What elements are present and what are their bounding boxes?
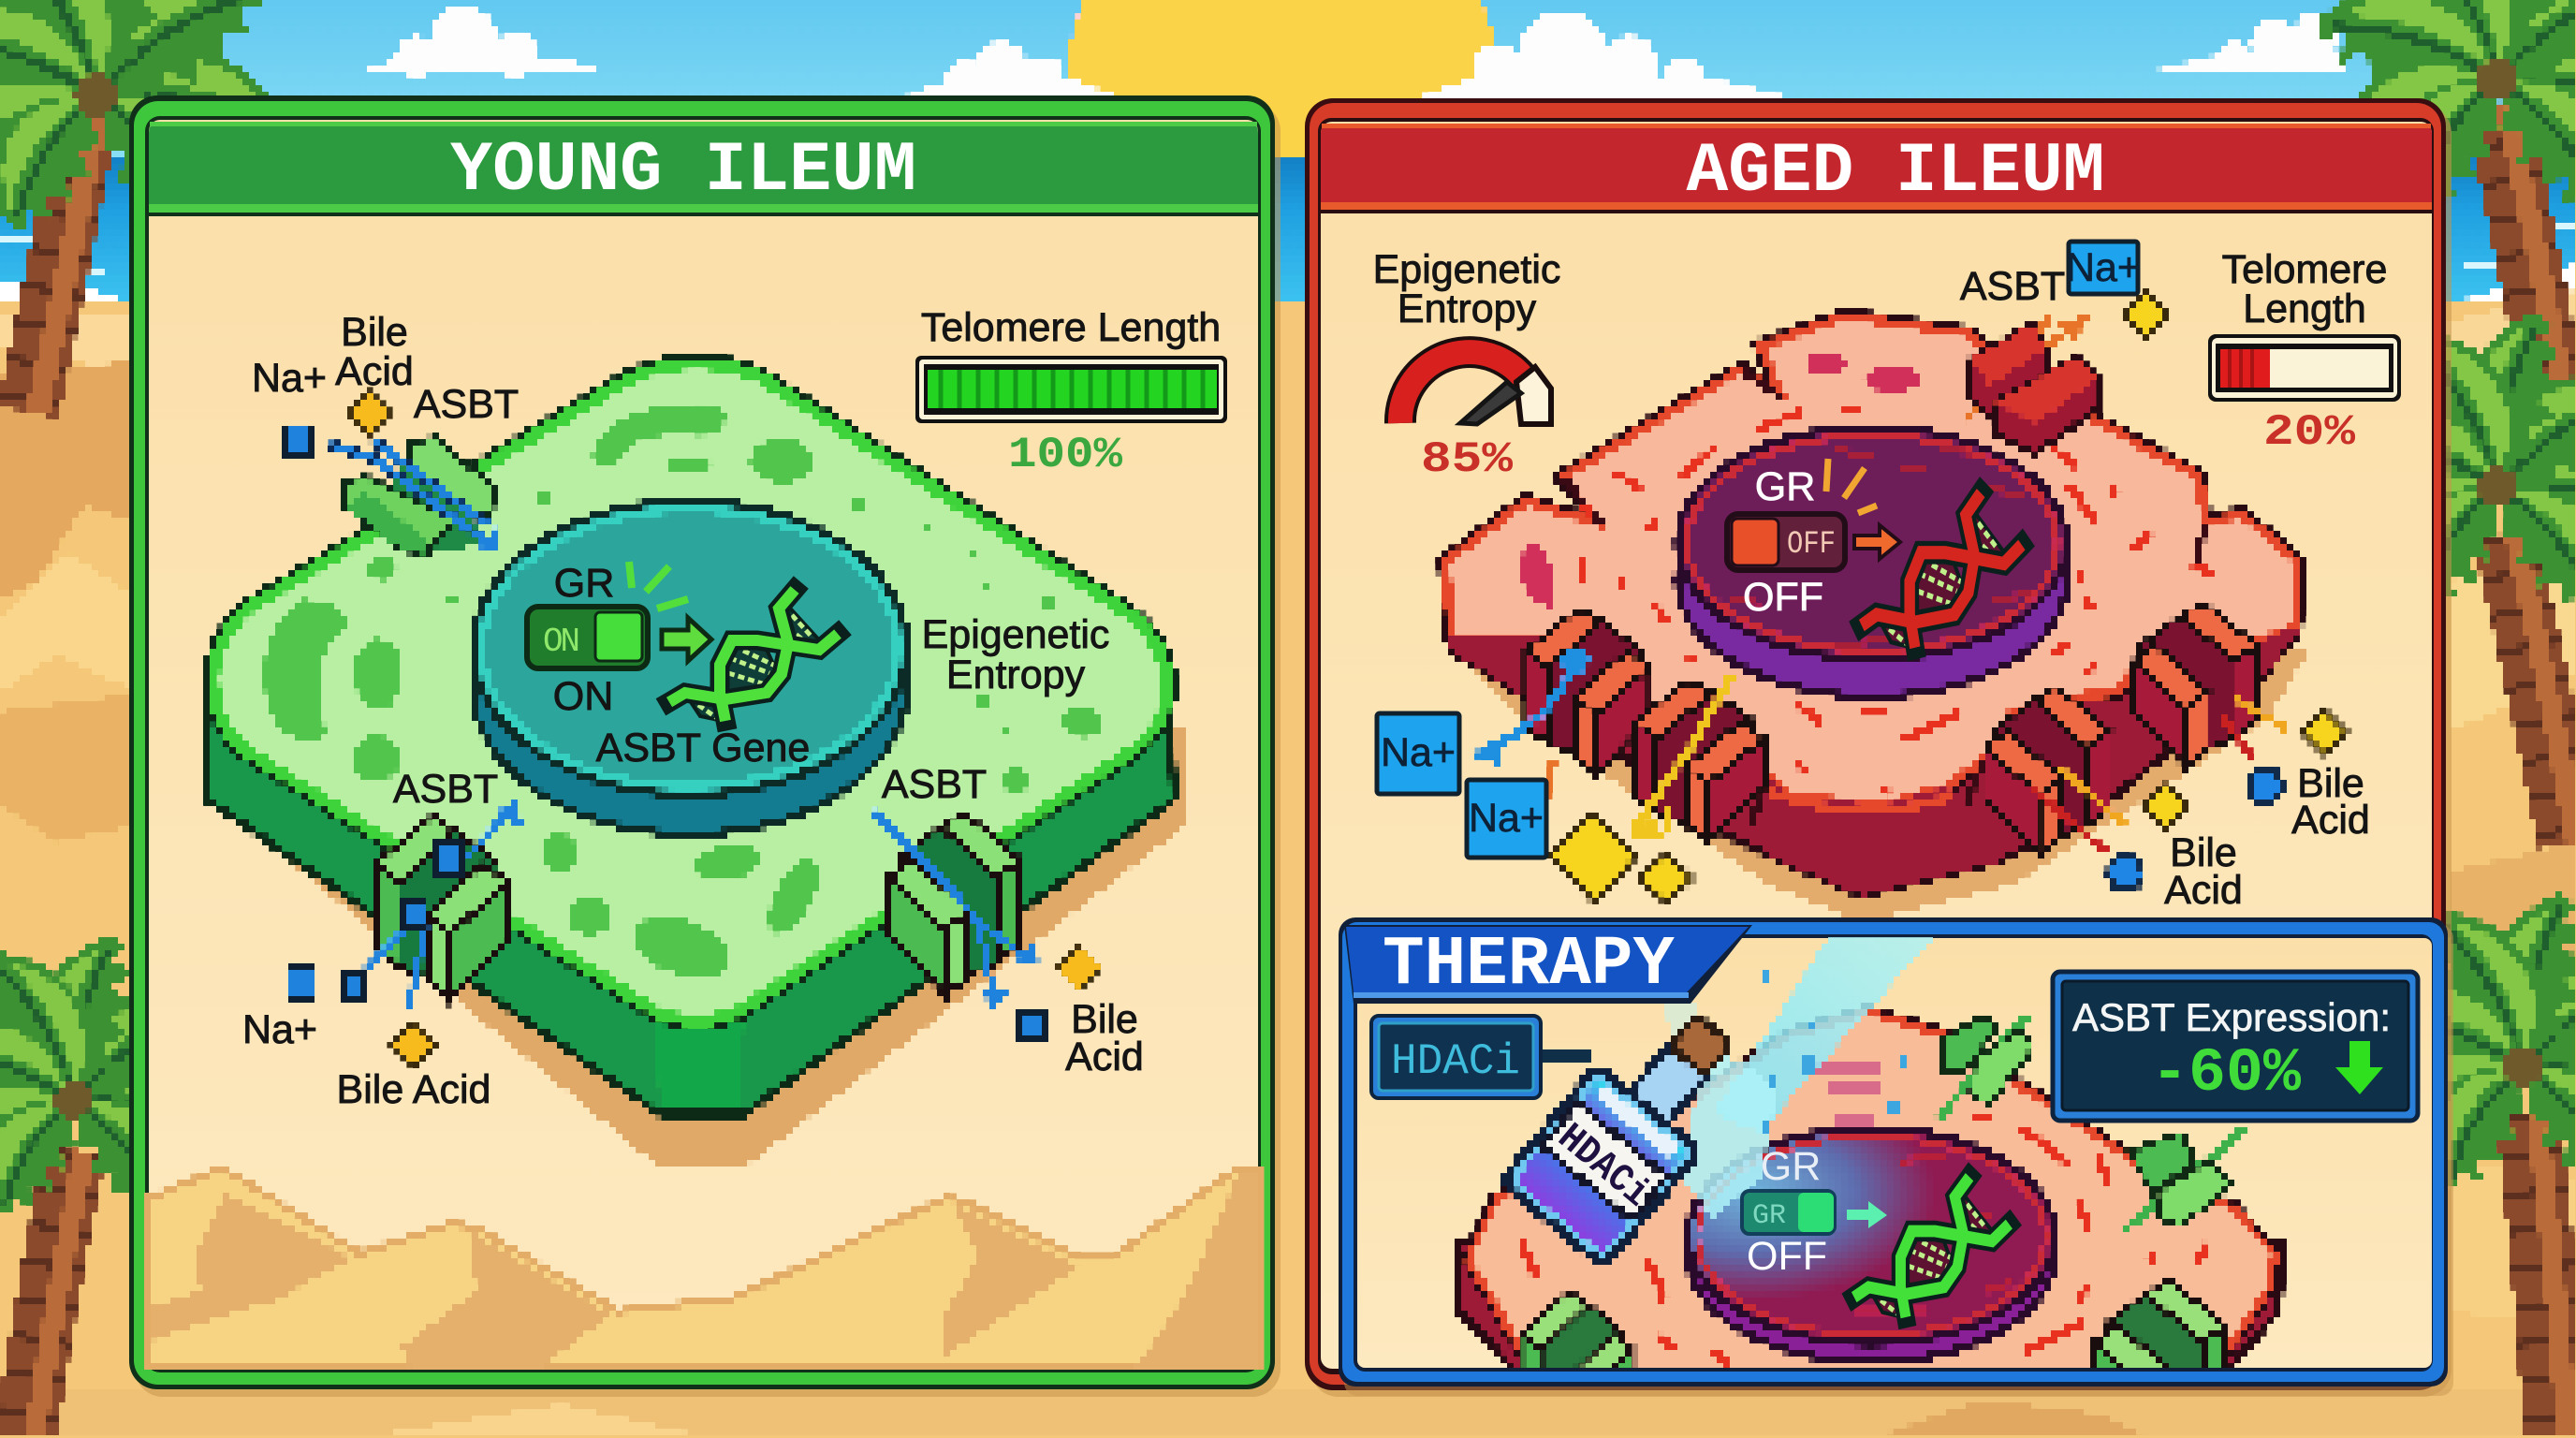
nucleus content: therapy <box>1742 1144 2009 1317</box>
label: epigenetic entropy: Entropy <box>946 653 1086 697</box>
palm tree: bottom right <box>2339 882 2576 1438</box>
toggle: GR recovering: GR <box>1752 1200 1786 1232</box>
activity sparks <box>629 562 688 609</box>
toggle: GR ON: ON <box>543 623 580 661</box>
panel frame: blue <box>1339 917 2453 1396</box>
label: bile acid lower left: Bile Acid <box>337 1067 490 1112</box>
gauge arc <box>1400 352 1551 424</box>
value: 20%: 20% <box>2263 408 2355 457</box>
label: telomere length: Telomere <box>2222 247 2387 292</box>
value: 100%: 100% <box>1008 431 1122 479</box>
epigenetic entropy gauge <box>1373 247 1560 484</box>
title: aged ileum: AGED ILEUM <box>1687 132 2104 212</box>
label: ASBT Gene: ASBT Gene <box>596 726 810 770</box>
panel: therapy <box>1339 917 2453 1438</box>
label: ASBT top: ASBT <box>414 382 519 427</box>
toggle: GR recovering <box>1742 1191 1835 1234</box>
label: telomere length: Length <box>2243 286 2366 331</box>
header bar: aged <box>1321 124 2432 213</box>
Na+ chip left 1 <box>1377 713 1459 794</box>
label: bile acid top: Bile <box>341 310 408 355</box>
Na+ chip left 1: Na+ <box>1381 730 1456 775</box>
bar: telomere 20% <box>2208 334 2401 402</box>
arrow: restored signal <box>1847 1201 1887 1228</box>
telomere meter: young <box>915 305 1227 479</box>
value: 85%: 85% <box>1421 435 1513 484</box>
clouds <box>354 6 2348 101</box>
label: OFF: OFF <box>1747 1234 1827 1279</box>
Na+ chip left 2: Na+ <box>1469 796 1544 841</box>
icon: damaged DNA <box>1862 493 2022 648</box>
label: GR: GR <box>1761 1144 1821 1189</box>
toggle: GR OFF: OFF <box>1787 527 1836 563</box>
panel: young ileum <box>129 95 1281 1397</box>
palm tree: middle right <box>2314 301 2576 843</box>
label: ASBT lower right: ASBT <box>882 762 987 807</box>
Na+ chip left 2 <box>1467 780 1546 858</box>
label: ASBT lower left: ASBT <box>393 767 498 812</box>
palm tree: bottom left <box>0 924 248 1438</box>
arrow: blocked signal <box>1854 525 1900 559</box>
mini damaged cell with therapy <box>1455 1003 2287 1368</box>
arrow: GR to gene <box>662 618 711 661</box>
isometric healthy cell <box>208 363 1187 1164</box>
label: epigenetic entropy: Epigenetic <box>922 612 1109 657</box>
label: bile acid top: Acid <box>335 349 414 394</box>
arrow: down <box>2335 1041 2383 1094</box>
toggle: GR ON <box>527 607 648 668</box>
title tab: therapy: THERAPY <box>1383 926 1676 1005</box>
label: epigenetic entropy: Epigenetic <box>1373 247 1560 292</box>
isometric damaged cell <box>1446 294 2347 922</box>
callout: ASBT expression <box>2053 972 2418 1121</box>
label: GR: GR <box>554 561 614 606</box>
callout: ASBT expression: -60% <box>2151 1038 2301 1108</box>
bar: telomere 100% <box>915 356 1227 423</box>
callout: HDACi drug label <box>1371 1016 1591 1098</box>
spray of drug <box>1661 940 1931 1217</box>
telomere meter: aged <box>2208 247 2401 457</box>
icon: DNA helix <box>669 590 838 721</box>
palm tree: top right <box>2305 0 2576 412</box>
label: telomere length: Telomere Length <box>921 305 1221 350</box>
icon: HDACi bottle <box>1501 987 1765 1267</box>
damage sparks <box>1826 459 1877 513</box>
label: OFF: OFF <box>1743 575 1823 620</box>
label: bile acid lower: Bile <box>2170 830 2237 875</box>
Na+ chip top: Na+ <box>2066 245 2141 290</box>
callout: ASBT expression: ASBT Expression: <box>2072 995 2391 1039</box>
panel frame: red <box>1305 98 2452 1397</box>
label: bile acid lower: Acid <box>2164 868 2243 913</box>
palm tree: top left <box>0 0 300 412</box>
label: bile acid lower right: Bile <box>1071 997 1138 1042</box>
label: Na+ lower left: Na+ <box>242 1007 317 1052</box>
callout: HDACi drug label: HDACi <box>1391 1037 1520 1086</box>
nucleus content: aged <box>1727 459 2022 648</box>
label: bile acid right: Bile <box>2297 761 2364 806</box>
label: ON: ON <box>553 674 613 719</box>
label: bile acid right: Acid <box>2291 798 2370 843</box>
icon: repaired DNA <box>1854 1177 2009 1317</box>
toggle: GR OFF <box>1727 514 1845 570</box>
sand dunes <box>149 1168 1258 1367</box>
label: ASBT top: ASBT <box>1960 264 2065 309</box>
panel: aged ileum <box>1305 98 2452 1397</box>
label: Na+ top: Na+ <box>252 356 327 401</box>
nucleus content: young <box>527 561 838 770</box>
label: epigenetic entropy: Entropy <box>1398 286 1537 331</box>
title: young ileum: YOUNG ILEUM <box>450 131 916 211</box>
label: HDACi on bottle: HDACi <box>1549 1115 1659 1216</box>
label: bile acid lower right: Acid <box>1065 1034 1144 1079</box>
panel frame: green <box>129 95 1281 1397</box>
label: GR: GR <box>1755 464 1815 509</box>
header bar: young <box>149 122 1258 216</box>
